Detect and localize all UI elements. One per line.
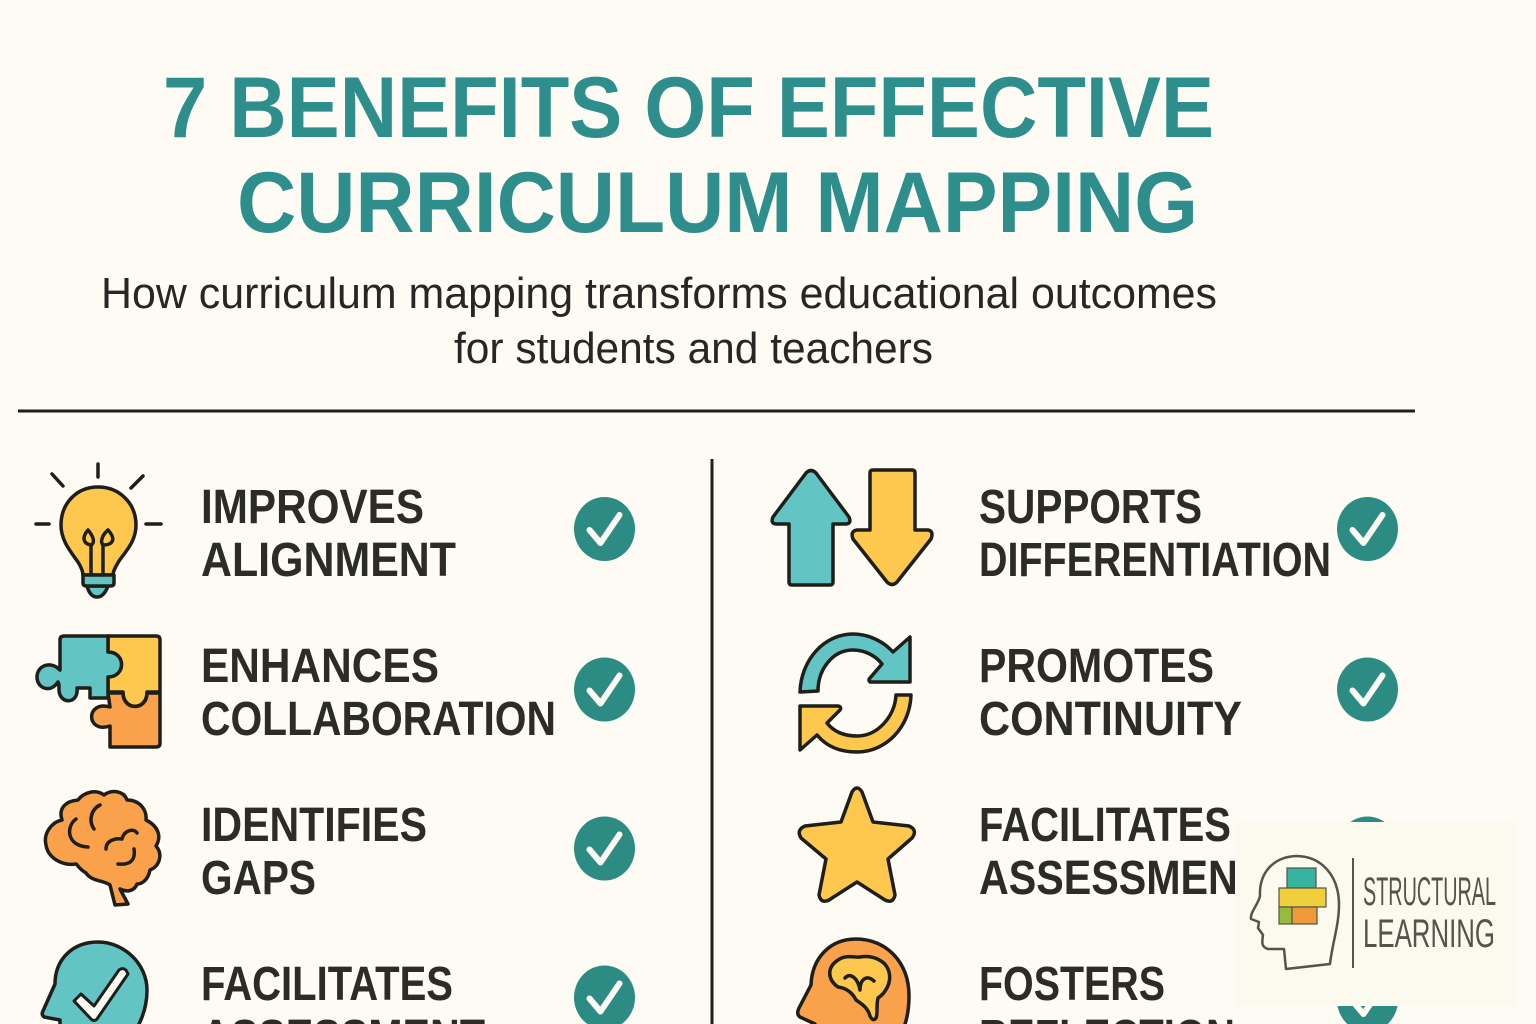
label <box>201 640 556 746</box>
label: ENHANCES <box>201 640 439 693</box>
icon: head with check <box>42 942 147 1024</box>
label <box>979 640 1242 746</box>
subtitle: How curriculum mapping transforms educational outcomes <box>101 269 1217 318</box>
panel: benefit identifies gaps <box>45 792 635 905</box>
label: FOSTERS <box>979 958 1165 1011</box>
icon: up and down arrows <box>772 470 932 585</box>
panel: benefit improves alignment <box>36 464 635 597</box>
label: ALIGNMENT <box>201 534 456 587</box>
logo blocks <box>1279 868 1326 924</box>
label: CONTINUITY <box>979 693 1242 746</box>
label <box>201 799 427 905</box>
label: FACILITATES <box>201 958 453 1011</box>
label: IDENTIFIES <box>201 799 427 852</box>
check badge <box>574 816 635 880</box>
title: CURRICULUM MAPPING <box>237 155 1198 251</box>
check badge <box>574 658 635 722</box>
logo wordmark <box>1363 870 1496 956</box>
panel: benefit facilitates assessment <box>42 942 635 1024</box>
logo head outline <box>1251 856 1339 969</box>
label: PROMOTES <box>979 640 1214 693</box>
check badge <box>574 497 635 561</box>
check badge <box>1337 497 1398 561</box>
label: FACILITATES <box>979 799 1231 852</box>
panel: benefit promotes continuity <box>800 634 1398 752</box>
check badge <box>1337 968 1398 1024</box>
subtitle: for students and teachers <box>454 324 933 373</box>
icon: brain <box>45 792 160 905</box>
check badge <box>1337 658 1398 722</box>
icon: light bulb <box>36 464 161 597</box>
label: COLLABORATION <box>201 693 556 746</box>
subtitle <box>101 269 1217 373</box>
title: 7 BENEFITS OF EFFECTIVE <box>163 60 1214 156</box>
panel: benefit facilitates assessment right <box>799 788 1398 905</box>
icon: puzzle <box>37 636 160 747</box>
panel: benefit fosters reflection <box>798 939 1398 1024</box>
label <box>979 481 1331 587</box>
label <box>979 799 1263 905</box>
label: IMPROVES <box>201 481 424 534</box>
title <box>163 60 1214 251</box>
label: SUPPORTS <box>979 481 1202 534</box>
panel: benefit enhances collaboration <box>37 636 635 747</box>
label: GAPS <box>201 852 316 905</box>
label <box>201 481 456 587</box>
icon: cycle arrows <box>800 634 911 752</box>
panel: benefit supports differentiation <box>772 470 1398 587</box>
check badge <box>1337 816 1398 880</box>
check badge <box>574 966 635 1024</box>
icon: star <box>799 788 914 901</box>
icon: head with brain <box>798 939 909 1024</box>
label: DIFFERENTIATION <box>979 534 1331 587</box>
logo: Structural Learning <box>1235 822 1516 1006</box>
label: ASSESSMENT <box>979 852 1263 905</box>
